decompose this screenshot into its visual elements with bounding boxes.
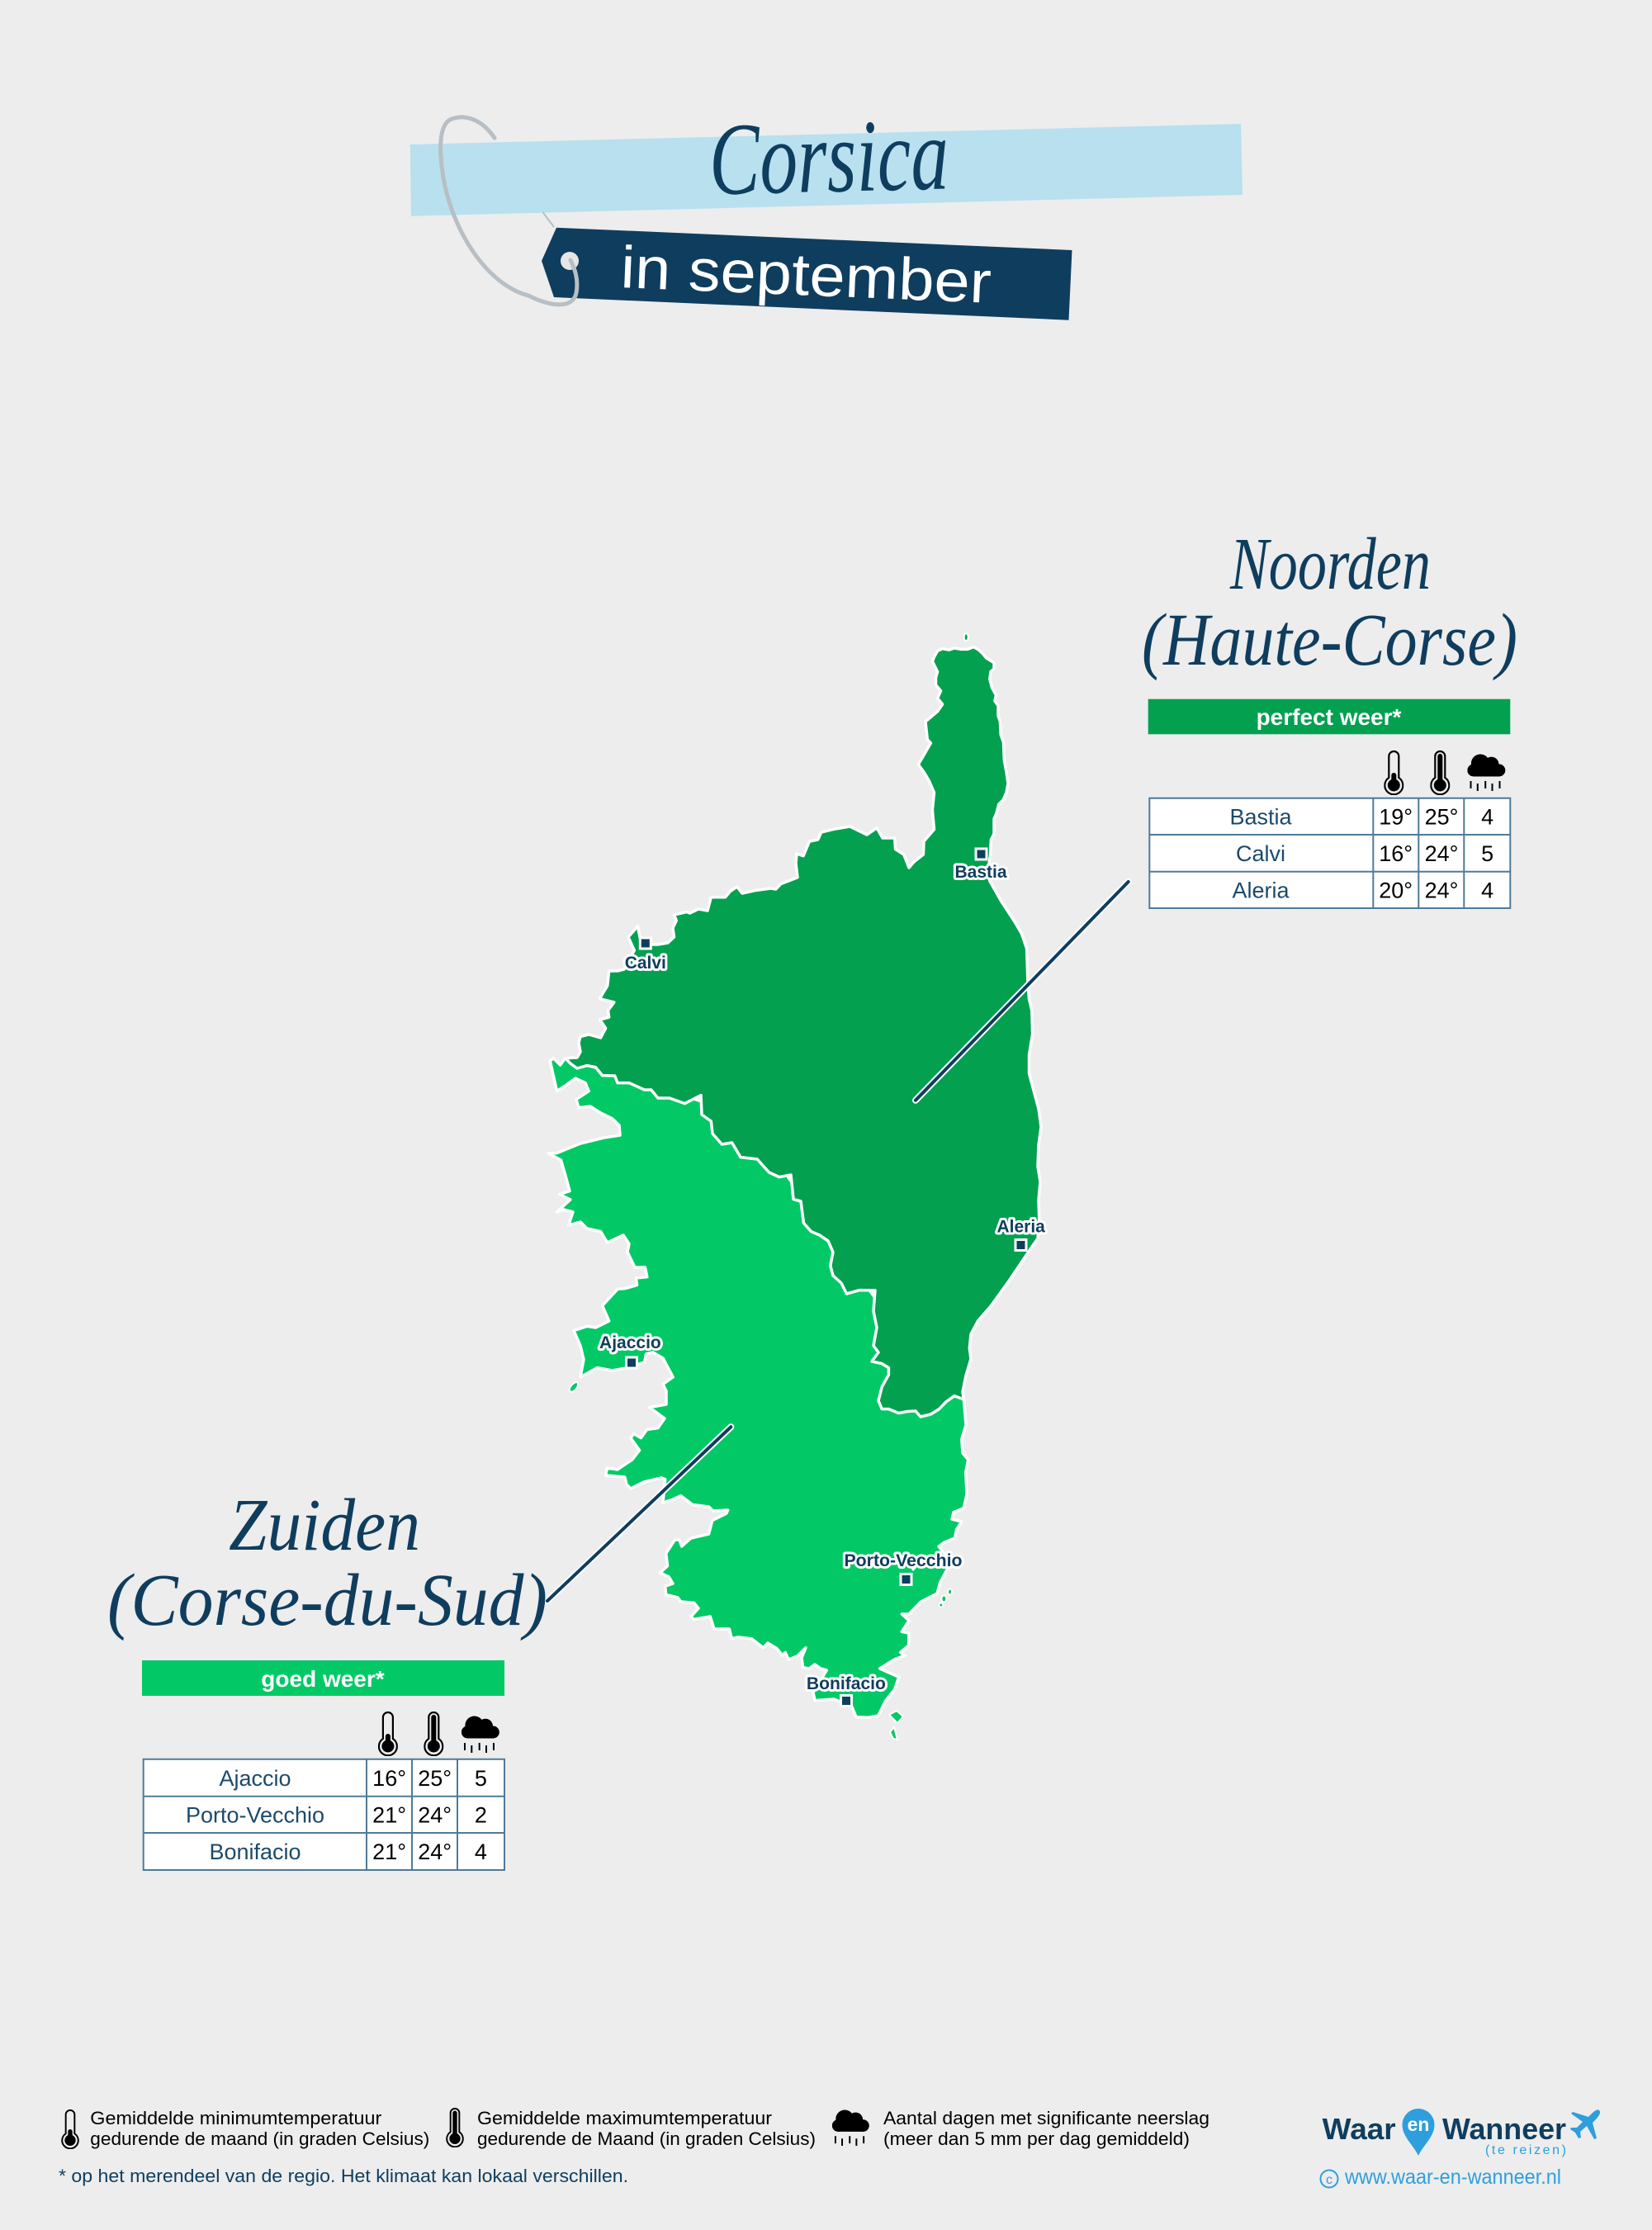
- islets: Porto-Vecchio: [939, 1588, 952, 1607]
- footnote: * op het merendeel van de regio. Het klimaat kan lokaal verschillen.: [59, 2166, 628, 2186]
- table: Zuiden: [144, 1759, 504, 1870]
- city: Bonifacio: Bonifacio: [807, 1674, 886, 1693]
- table: Noorden: 4: [1481, 878, 1493, 903]
- table: Zuiden: 16°: [372, 1766, 406, 1791]
- rating bar: goed weer: goed weer*: [261, 1666, 385, 1692]
- panel: Noorden: [1142, 523, 1517, 908]
- map of Corsica: [548, 633, 1041, 1740]
- tag hole: [561, 252, 579, 270]
- islet: Cap Corse: [964, 633, 968, 641]
- legend icon: minimum temperature: [62, 2110, 78, 2148]
- table: Noorden: 16°: [1379, 841, 1413, 866]
- icon: plane: [1570, 2109, 1600, 2139]
- table: Noorden: Bastia: [1229, 804, 1293, 829]
- icon: maximum temperature: [1431, 751, 1449, 794]
- table: Noorden: Aleria: [1232, 878, 1290, 903]
- leader line: Noorden: [916, 882, 1129, 1101]
- logo tagline: (te reizen): [1485, 2143, 1566, 2157]
- city: Ajaccio: [599, 1333, 661, 1368]
- legend text: maximum temperature: Gemiddelde maximumtemperatuur: [477, 2108, 772, 2128]
- logo pin: [1402, 2109, 1435, 2156]
- title band: [410, 124, 1243, 216]
- legend text: maximum temperature: [477, 2108, 816, 2149]
- logo: Waar en Wanneer: [1321, 2109, 1600, 2189]
- city: Aleria: Aleria: [997, 1217, 1045, 1237]
- september tag: [542, 228, 1072, 320]
- leader line: Zuiden: [547, 1427, 731, 1601]
- city: Bastia: [954, 849, 1007, 882]
- legend text: rain days: (meer dan 5 mm per dag gemiddeld): [883, 2128, 1190, 2149]
- icon: rain cloud: [1467, 755, 1505, 791]
- city: Bonifacio: [807, 1674, 886, 1706]
- legend text: maximum temperature: gedurende de Maand (in graden Celsius): [477, 2128, 816, 2149]
- city: Porto-Vecchio: Porto-Vecchio: [844, 1551, 963, 1570]
- legend text: rain days: [883, 2108, 1209, 2149]
- heading: Haute-Corse: (Haute-Corse): [1142, 599, 1517, 681]
- tag string back: [543, 212, 554, 227]
- city: Bastia: Bastia: [954, 863, 1007, 882]
- table: Noorden: 20°: [1379, 878, 1413, 903]
- table: Noorden: 5: [1481, 841, 1493, 866]
- city: Ajaccio: Ajaccio: [599, 1333, 661, 1352]
- heading: Zuiden: Zuiden: [229, 1484, 420, 1566]
- city: Porto-Vecchio: [844, 1551, 963, 1585]
- icon: maximum temperature: [424, 1712, 443, 1755]
- table: Zuiden: 21°: [372, 1839, 406, 1864]
- legend icon: rain cloud: [832, 2109, 869, 2146]
- heading: Corse-du-Sud: (Corse-du-Sud): [107, 1560, 547, 1641]
- copyright icon: c: [1326, 2173, 1332, 2187]
- table: Zuiden: Bonifacio: [209, 1839, 301, 1864]
- table: Noorden: 24°: [1425, 878, 1458, 903]
- Porto-Vecchio bay inlet: [912, 1555, 926, 1570]
- region: Zuiden (Corse-du-Sud): [548, 1058, 968, 1740]
- table: Zuiden: 24°: [418, 1803, 452, 1828]
- city: Aleria: [997, 1217, 1045, 1250]
- legend text: rain days: Aantal dagen met significante neerslag: [883, 2108, 1209, 2128]
- table: Zuiden: Ajaccio: [219, 1766, 291, 1791]
- logo word: Waar: Waar: [1323, 2112, 1396, 2146]
- website url: www.waar-en-wanneer.nl: [1344, 2166, 1561, 2189]
- title block: [410, 97, 1243, 320]
- icon: minimum temperature: [379, 1712, 397, 1755]
- table: Noorden: 24°: [1425, 841, 1458, 866]
- table: Zuiden: 5: [475, 1766, 487, 1791]
- islet: Ajaccio bay: [568, 1380, 580, 1394]
- icon: rain cloud: [462, 1716, 499, 1753]
- legend text: minimum temperature: [90, 2108, 429, 2149]
- table: Zuiden: 4: [475, 1839, 487, 1864]
- rating bar: goed weer: [142, 1660, 504, 1696]
- islets: Lavezzi: [889, 1711, 903, 1740]
- tag string: [441, 117, 577, 305]
- table: Zuiden: Porto-Vecchio: [186, 1803, 324, 1828]
- legend: [62, 2108, 1209, 2149]
- logo word: Wanneer: Wanneer: [1442, 2112, 1566, 2146]
- legend icon: maximum temperature: [447, 2109, 463, 2147]
- city: Calvi: Calvi: [625, 954, 666, 973]
- table: Zuiden: 21°: [372, 1803, 406, 1828]
- table: Noorden: 4: [1481, 804, 1493, 829]
- panel: Zuiden: [107, 1484, 547, 1870]
- region: Noorden (Haute-Corse): [566, 633, 1041, 1417]
- icon: minimum temperature: [1385, 751, 1403, 794]
- table: Zuiden: 2: [475, 1803, 487, 1828]
- legend text: minimum temperature: gedurende de maand (in graden Celsius): [90, 2128, 429, 2149]
- logo word: en: en: [1408, 2114, 1429, 2135]
- table: Noorden: Calvi: [1236, 841, 1285, 866]
- table: Noorden: 25°: [1425, 804, 1458, 829]
- legend text: minimum temperature: Gemiddelde minimumtemperatuur: [90, 2108, 381, 2128]
- table: Zuiden: 24°: [418, 1839, 452, 1864]
- table: Noorden: [1149, 798, 1510, 908]
- city: Calvi: [625, 938, 666, 973]
- rating bar: perfect weer: [1148, 699, 1510, 734]
- table: Zuiden: 25°: [418, 1766, 452, 1791]
- title: Corsica: Corsica: [708, 97, 950, 217]
- table: Noorden: 19°: [1379, 804, 1413, 829]
- copyright icon: [1321, 2170, 1337, 2188]
- subtitle: in september: in september: [619, 234, 992, 316]
- rating bar: perfect weer: perfect weer*: [1257, 704, 1402, 730]
- heading: Noorden: Noorden: [1229, 523, 1431, 605]
